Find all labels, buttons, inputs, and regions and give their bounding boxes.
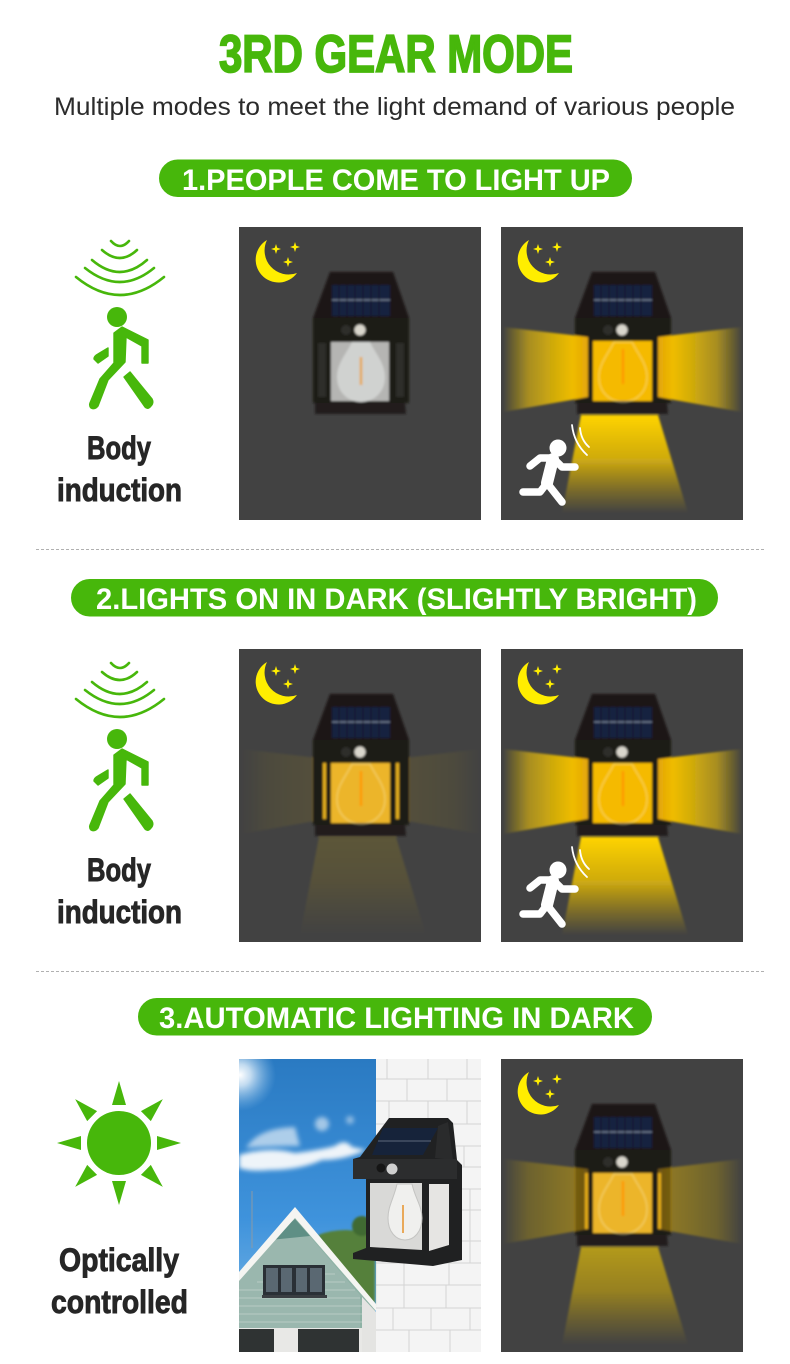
section 1 heading pill: 1.PEOPLE COME TO LIGHT UP (182, 164, 610, 197)
panel: lamp off at night (239, 227, 481, 520)
section 2 label: body induction: Body (87, 852, 151, 888)
title: 3RD GEAR MODE (219, 25, 573, 84)
section 3 label: optically controlled: controlled (51, 1284, 188, 1320)
section 2 heading pill: 2.LIGHTS ON IN DARK (SLIGHTLY BRIGHT) (96, 583, 697, 616)
section 1 label: body induction (57, 430, 182, 508)
section 1 icon: body induction walker (76, 241, 164, 409)
section 3 heading pill: 3.AUTOMATIC LIGHTING IN DARK (159, 1002, 635, 1035)
section 2 icon: body induction walker (76, 663, 164, 831)
section 1 label: body induction: Body (87, 430, 151, 466)
section 1 label: body induction: induction (57, 472, 182, 508)
section 3 label: optically controlled: Optically (59, 1242, 179, 1278)
section 2 label: body induction: induction (57, 894, 182, 930)
panel: lamp bright when person comes (501, 227, 743, 520)
section 2 label: body induction (57, 852, 182, 930)
divider 1 (36, 548, 765, 550)
panel: lamp bright when person comes, second mode (501, 649, 743, 942)
panel: daytime photo of lamp on white brick wall (239, 1059, 481, 1352)
panel: lamp automatically lit in dark (501, 1059, 743, 1352)
section 3 label: optically controlled (51, 1242, 188, 1320)
section 3 icon: sun (57, 1081, 181, 1205)
divider 2 (36, 970, 765, 972)
panel: lamp dim in dark (239, 649, 481, 942)
icon: daytime lamp (353, 1118, 462, 1266)
subtitle: Multiple modes to meet the light demand of various people (54, 93, 735, 121)
